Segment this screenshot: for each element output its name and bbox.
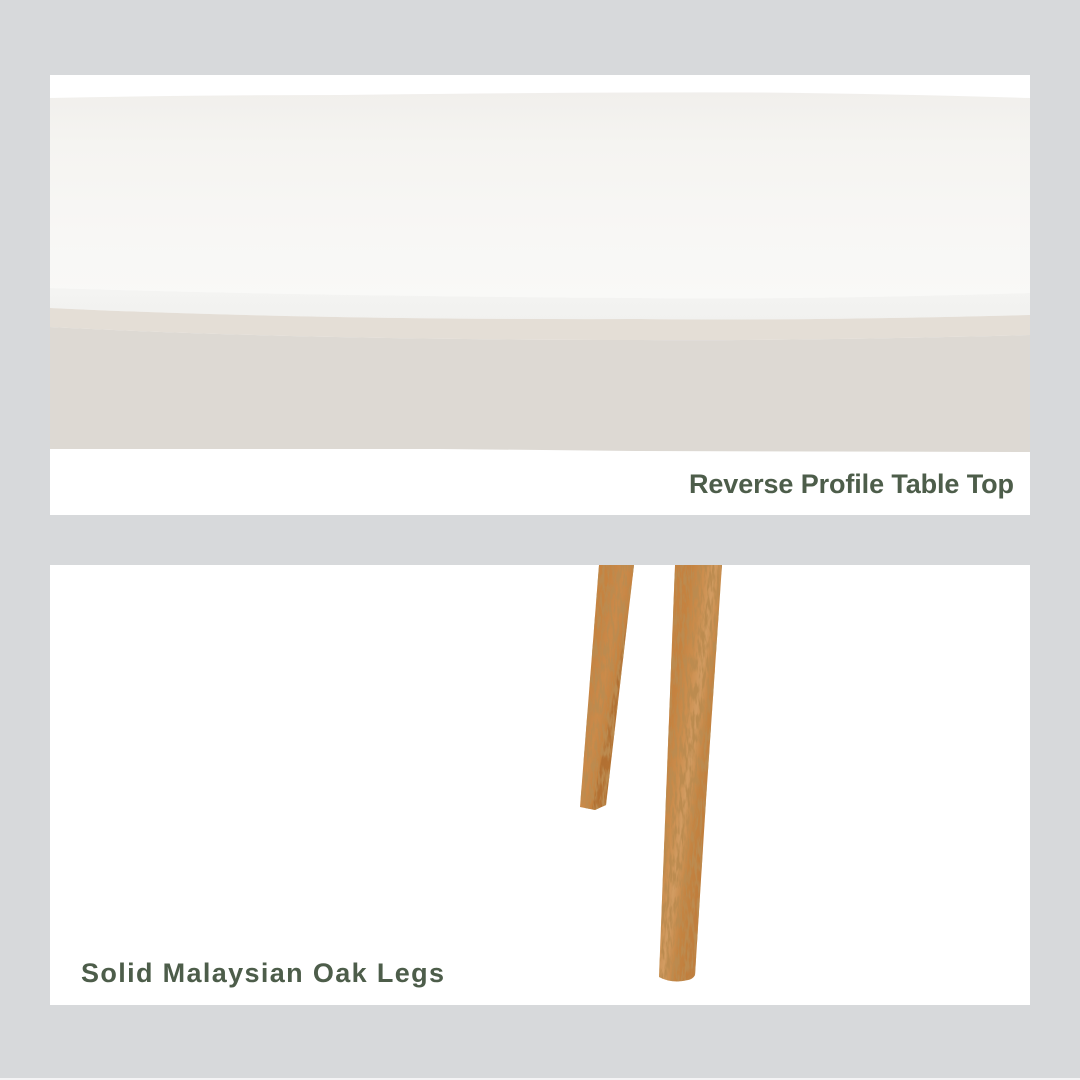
- table top surface: [50, 92, 1030, 298]
- table edge lip: [50, 288, 1030, 320]
- panel background bottom: [50, 565, 1030, 1005]
- label: reverse profile table top: Reverse Profile Table Top: [689, 469, 1014, 499]
- panel: solid oak legs: [50, 565, 1030, 1005]
- table underside bevel: [50, 308, 1030, 340]
- panel: reverse profile table top: [50, 75, 1030, 515]
- panel background top: [50, 75, 1030, 515]
- table underside: [50, 327, 1030, 452]
- rear oak leg: [580, 565, 634, 810]
- label: solid malaysian oak legs: Solid Malaysian Oak Legs: [81, 958, 444, 988]
- bottom edge strip: [0, 1078, 1080, 1080]
- front oak leg: [659, 565, 722, 981]
